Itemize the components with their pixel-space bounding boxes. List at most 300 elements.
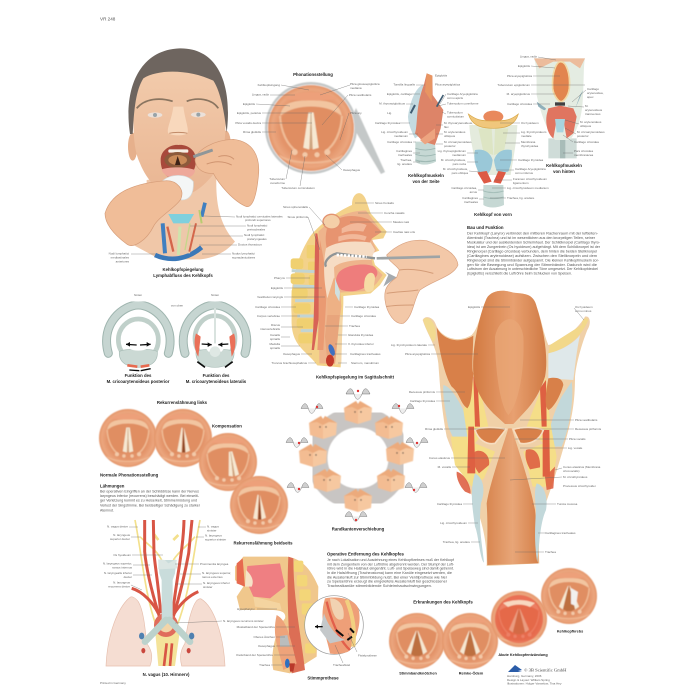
- mucosal wave tiles: [299, 401, 414, 512]
- posterior caption: [107, 373, 170, 384]
- front labels: Membrana: [521, 140, 536, 144]
- compensation circle: [199, 433, 257, 491]
- section labels: Cartilagines tracheales: [545, 531, 576, 535]
- face skin: [133, 55, 226, 197]
- front labels: Foramen cricothyroideum: [513, 177, 548, 181]
- section labels: Plica aryepiglottica: [405, 352, 430, 356]
- tongue: [336, 265, 377, 291]
- heading: [546, 163, 582, 174]
- side labels: M. thyroepiglotticus: [379, 102, 405, 106]
- front labels: Cartilago cricoidea,: [451, 186, 477, 190]
- posterior caption: M. cricoarytenoideus posterior: [107, 379, 170, 384]
- trachea: [548, 138, 577, 158]
- examiner left hand: [105, 181, 182, 246]
- back labels: obliquus: [580, 124, 592, 128]
- red cricothyroid muscles: [477, 171, 506, 184]
- panel: Kehlkopfspiegelung and lymph drainage portrait: [105, 48, 283, 278]
- neck dissection window: [155, 203, 205, 259]
- disease labels: Stimmbandknötchen: [399, 672, 437, 676]
- direction labels: von oben: [171, 304, 183, 308]
- lateralis caption: Funktion des: [203, 373, 230, 378]
- ears: [128, 131, 231, 161]
- side labels: Cartilago cricoidea: [387, 140, 412, 144]
- side labels: Cartilago thyroidea: [375, 121, 400, 125]
- text block: Operative Entfernung: röhre wird in die Halshaut eingenäht. Luft- und Speiseweg sind damit getrennt.: [327, 566, 454, 570]
- paralysis circle: [154, 409, 212, 467]
- heading: von hinten: [553, 169, 575, 174]
- posterior caption: Funktion des: [125, 373, 152, 378]
- phonation labels: Lingua, radix: [252, 92, 269, 96]
- panel: N. vagus with lungs: [100, 520, 264, 685]
- blue cricothyroid: [474, 150, 493, 173]
- heading: Kehlkopfspiegelung im Sagittalschnitt: [316, 374, 395, 380]
- vagus labels: N. laryngeus superior,: [202, 571, 231, 575]
- ventricles: [475, 427, 506, 444]
- epiglottis: [473, 291, 546, 424]
- section labels: cricovocalis): [563, 469, 580, 473]
- section labels: Lig. vocale: [568, 446, 583, 450]
- text block: Operative Entfernung: mit dem Zungenbein von der Luftröhre abgetrennt werden. Der Stumpf der Luft-: [327, 562, 454, 566]
- back labels: M. cricoarytenoideus: [577, 130, 605, 134]
- text block: Bau und Funktion: Der Kehlkopf (Larynx) verbindet den mittleren Rachenraum mit der luftleiten-: [467, 232, 598, 236]
- panel: sagittal section: [255, 193, 458, 380]
- sagittal labels: Concha nasalis: [384, 211, 405, 215]
- front labels: ligamentum: [513, 181, 529, 185]
- section labels: Cartilago thyroidea: [410, 399, 435, 403]
- sagittal labels: Vestibulum laryngis: [257, 295, 283, 299]
- publisher logo and imprint: Design & Layout: William Spring: [507, 678, 550, 682]
- text block: Bau und Funktion: Luftstrom der Ausatmung in unterschiedliche Töne umgesetzt. Der Kehlkopfdeckel: [467, 267, 598, 271]
- mirror view circle: [265, 82, 385, 174]
- text block: Lähmungen: Bei operativen Eingriffen an der Schilddrüse kann der Nervus: [100, 490, 199, 494]
- vagus labels: [103, 524, 264, 623]
- logo mark: [508, 665, 522, 672]
- vagus labels: N. laryngeus: [113, 533, 130, 537]
- hair: [128, 48, 228, 134]
- tongue: [246, 563, 285, 598]
- sagittal labels: Sinus sphenoidalis: [283, 205, 308, 209]
- vagus labels: recurrens dexter: [108, 584, 130, 588]
- normal phonation circle: [99, 409, 157, 467]
- section labels: Cartilago thyroidea: [437, 502, 462, 506]
- side labels: flex: [444, 125, 449, 129]
- right lung: [181, 599, 225, 666]
- bilateral label: Rekurrenslähmung beidseits: [234, 540, 293, 546]
- skin silhouette: [235, 557, 318, 673]
- disease labels: Kehlkopfkrebs: [557, 630, 583, 634]
- phonation labels: Rima glottidis: [243, 130, 261, 134]
- sagittal labels: Medulla: [269, 342, 280, 346]
- side labels: lig. anulare: [397, 162, 412, 166]
- larynx and trachea: [158, 560, 177, 623]
- sagittal labels: Oesophagus: [283, 352, 300, 356]
- vagus labels: sinister: [203, 585, 213, 589]
- front labels: pars obliqua: [452, 171, 468, 175]
- front labels: thyrohyoidea: [521, 144, 539, 148]
- grey ring: [317, 417, 399, 499]
- side labels: Epiglottis, cartilago: [387, 92, 412, 96]
- side labels: tracheales: [398, 153, 412, 157]
- lymph labels: mediastinales: [111, 256, 129, 260]
- Kompensation label: Kompensation: [212, 424, 242, 428]
- vagus labels: N. vagus dexter: [107, 524, 128, 528]
- sagittal labels: Epiglottis: [271, 286, 283, 290]
- front labels: Lig. cricothyroideum medianum: [507, 186, 549, 190]
- lymph labels: Nodi lymphatici: [109, 252, 129, 256]
- lymph labels: pretracheales: [247, 228, 266, 232]
- text block: Bau und Funktion: Atemtrakt (Trachea) und ist im wesentlichen aus den knorpeligen Teilen, seiner: [467, 236, 596, 240]
- panel: Kehlkopf von vorn: [438, 111, 549, 217]
- text block: Lähmungen: laryngeus inferior (recurrens) beschädigt werden. Bei einseiti-: [100, 494, 199, 498]
- phonation labels: Plica ary.: [350, 111, 362, 115]
- phonation labels: cuneiforme: [270, 181, 285, 185]
- lymph labels: anteriores: [116, 260, 129, 264]
- wave indicators: [286, 389, 428, 521]
- vagus labels: N. laryngeus recurrens sinister: [223, 619, 264, 623]
- vagus labels: superior dexter: [110, 537, 130, 541]
- text block: Operative Entfernung: [327, 552, 454, 588]
- publisher logo and imprint: © 3B Scientific GmbH: [524, 668, 567, 672]
- text block: Lähmungen: Lähmungen: [100, 484, 125, 488]
- heading: Kehlkopfmuskeln: [546, 163, 582, 168]
- sagittal labels: Glandula thyroidea: [348, 333, 374, 337]
- side labels: Plica aryepiglottica: [435, 82, 460, 86]
- front labels: [438, 121, 549, 204]
- left piriform recess: [437, 327, 473, 408]
- back labels: arytenoideus: [585, 108, 603, 112]
- phonation labels: Plica vocalis dextra: [235, 121, 261, 125]
- front labels: Cartilagines: [462, 196, 478, 200]
- prosthesis labels: Oesophagus: [258, 644, 275, 648]
- panel: Randkantenverschiebung: [286, 389, 428, 532]
- bilateral paralysis circle: [230, 476, 288, 534]
- text block: Bau und Funktion: Bau und Funktion: [467, 225, 504, 230]
- section labels: Os hyoideum: [575, 305, 593, 309]
- section labels: Lig. thyrohyoideum laterale: [391, 343, 427, 347]
- publisher logo and imprint: Illustrationen: Holger Vanselow, Tina Hey: [507, 682, 562, 686]
- sagittal labels: Cartilago cricoidea: [255, 305, 280, 309]
- vagus labels: N. laryngeus: [205, 534, 222, 538]
- right piriform recess: [546, 378, 563, 410]
- epiglottis: [553, 62, 570, 102]
- text block: Lähmungen: Atemnot.: [100, 508, 114, 512]
- text block: Lähmungen: [100, 484, 201, 512]
- lateralis function cartilage: [183, 305, 247, 367]
- prosthesis labels: Oberes Ästchen: [253, 635, 275, 639]
- side labels: Tonsilla lingualis: [393, 82, 415, 86]
- vagus labels: N. laryngealis inferior: [104, 571, 132, 575]
- lateralis caption: M. cricoarytenoideus lateralis: [186, 379, 247, 384]
- red muscle bundles: [457, 377, 555, 494]
- sagittal labels: Truncus brachiocephalicus: [271, 361, 307, 365]
- lower tongue spatula: [383, 272, 397, 287]
- trachea lumen: [487, 428, 538, 565]
- side labels: Tuberculum cuneiforme: [447, 102, 479, 106]
- sagittal labels: Sinus piriformis: [287, 215, 308, 219]
- phonation labels: Epiglottis: [243, 102, 255, 106]
- thyrohyoid membrane: [548, 335, 580, 380]
- section labels: Conus elasticus: [429, 456, 450, 460]
- publisher logo and imprint: Hamburg, Germany, 2006: [507, 674, 542, 678]
- vagus labels: dexter: [124, 575, 132, 579]
- sagittal labels: [255, 201, 416, 365]
- text block: Bau und Funktion: Muskulatur und der auskleidenden Schleimhaut. Der Schildknorpel (Cartilago thyro-: [467, 240, 600, 244]
- front labels: medianum: [452, 153, 466, 157]
- front labels: Lig. thyrohyoideum: [521, 130, 547, 134]
- laryngeal cancer circle: [541, 568, 597, 624]
- sagittal labels: Canalis: [270, 333, 280, 337]
- phonation labels: [235, 82, 380, 190]
- disease labels: Akute Kehlkopfentzündung: [498, 653, 548, 657]
- side labels: Trachea,: [400, 158, 412, 162]
- muscles: [415, 73, 443, 145]
- mediastinal fat: [155, 630, 180, 666]
- back labels: arytenoidea,: [587, 91, 604, 95]
- sagittal labels: Discus: [271, 323, 280, 327]
- panel: muscle function diagrams: [107, 293, 247, 384]
- right yellow fat and muscle: [523, 377, 557, 487]
- panel: Kehlkopfmuskeln von der Seite: [375, 73, 479, 184]
- brows, eyes and nose: [137, 99, 218, 135]
- text block: Operative Entfernung: zu Speiseröhre erzeugt die eingeleitete Ausatemluft bei geschlossener: [327, 580, 448, 584]
- section labels: Conus elasticus (Membrana: [563, 465, 601, 469]
- Stimmbandknötchen circle: [389, 613, 445, 669]
- nasal cavity: [326, 216, 382, 253]
- back labels: Cartilago: [587, 87, 599, 91]
- panel: Erkrankungen des Kehlkopfs: [389, 568, 597, 676]
- section labels: Tunica mucosa: [557, 502, 578, 506]
- heading: [408, 173, 444, 184]
- vertebrae: [291, 245, 317, 343]
- prosthesis labels: Hypopharynx: [237, 607, 255, 611]
- side labels: cornu apicis: [447, 96, 464, 100]
- section labels: Plica vocalis: [569, 437, 586, 441]
- hilar vessels: [139, 633, 194, 653]
- text block: Operative Entfernung: In die Halsöffnung (Tracheostoma) kann eine Kanüle eingesetzt werden, die: [327, 571, 452, 575]
- front labels: Lig. thyroepiglotticum: [438, 149, 466, 153]
- lower cartilages: [472, 473, 484, 563]
- back labels: M. aryepiglotticus: [507, 92, 530, 96]
- sagittal labels: spinalis: [270, 337, 280, 341]
- section labels: Rima glottidis: [425, 427, 443, 431]
- panel: Rekurrenslähmung links circles: [99, 400, 293, 546]
- direction labels: hinten: [134, 293, 142, 297]
- nerves yellow: [135, 520, 200, 657]
- front labels: M. cricothyroideus,: [441, 158, 466, 162]
- examiner right hand: [195, 139, 259, 207]
- back labels: posterior: [577, 134, 589, 138]
- heading: Phonationsstellung: [293, 72, 333, 77]
- back labels: M. arytenoideus: [580, 120, 602, 124]
- left yellow fat and muscle: [451, 373, 495, 487]
- front labels: Cartilago Aryepiglottica: [515, 167, 546, 171]
- side labels: Epiglottis: [435, 74, 448, 78]
- text block: Bau und Funktion: (Cartilagines arytenoideae) aufsitzen. Zwischen den Stellknorpeln und dem: [467, 254, 597, 258]
- thyroid cartilage: [534, 58, 585, 140]
- trachea parts: [280, 635, 290, 647]
- phonation labels: Oesophagus: [343, 168, 361, 172]
- prosthesis labels: Kieferband der Speiseröhre: [236, 653, 273, 657]
- aortic arch: [154, 613, 178, 637]
- prosthesis labels: Muskelband der Speiseröhre: [237, 625, 275, 629]
- section labels: Lig. cricothyroideum: [440, 521, 467, 525]
- section labels: Recessus piriformis: [409, 390, 435, 394]
- section labels: Epiglottis: [468, 305, 481, 309]
- side labels: posterior: [444, 144, 456, 148]
- sagittal labels: Cartilagines tracheales: [350, 352, 381, 356]
- side labels: Lig.: [387, 111, 392, 115]
- lymph labels: profundi superiores: [245, 218, 271, 222]
- prosthesis labels: Tracheafistel: [333, 663, 350, 667]
- back labels: Epiglottis: [518, 64, 530, 68]
- text block: Lähmungen: ger Verletzung kommt es zu Heiserkeit, Stimmermüdung und: [100, 498, 197, 502]
- sagittal labels: Cartilago thyroidea: [354, 305, 380, 309]
- back labels: M.: [585, 104, 588, 108]
- back labels: Tuberculum epiglotticum: [497, 83, 530, 87]
- side labels: corniculatum: [447, 114, 465, 118]
- side labels: Cartilagines: [396, 149, 412, 153]
- lymph labels: supraclaviculares: [232, 256, 256, 260]
- front labels: mediale: [521, 134, 532, 138]
- text block: Operative Entfernung: die Ausatemluft zur Stimmbildung nutzt. Bei einer Ventilprothese wie hier: [327, 576, 448, 580]
- back labels: Plica aryepiglottica: [507, 74, 532, 78]
- sagittal labels: Cartilago cricoidea: [351, 314, 376, 318]
- vertebrae: [294, 561, 316, 653]
- heading: Kehlkopfspiegelung: [162, 267, 204, 272]
- side labels: Tuberculum: [447, 110, 463, 114]
- heading: [153, 267, 213, 278]
- back labels: [497, 54, 605, 157]
- section labels: Processus cricothyroidei: [563, 484, 596, 488]
- sagittal labels: Trachea: [349, 324, 360, 328]
- text block: Bau und Funktion: Ringknorpel (Cartilago cricoidea) verbunden, dem hinten die beiden Stellknorpel: [467, 250, 597, 254]
- front labels: Cartilago thyroidea: [518, 158, 544, 162]
- phonation labels: Plica glossoepiglottica: [350, 82, 380, 86]
- panel: Stimmprothese section: [235, 557, 377, 680]
- trachea: [325, 315, 340, 363]
- text block: Operative Entfernung: Je nach Lokalisation und Ausdehnung eines Kehlkopfkrebses muß der Kehlkopf: [327, 558, 454, 562]
- lymph labels: [109, 214, 283, 264]
- vagus labels: superior sinister: [205, 538, 226, 542]
- heading: N. vagus (10. Hirnnerv): [143, 672, 190, 677]
- back labels: Cartilago cricoidea: [574, 140, 599, 144]
- front labels: Os hyoideum: [521, 121, 539, 125]
- Reinke-Ödem circle: [442, 613, 498, 669]
- open mouth with mirror view: [161, 145, 196, 180]
- phonation labels: Epiglottis, petiolus: [237, 111, 261, 115]
- trachea: [415, 142, 436, 165]
- direction labels: hinten: [211, 293, 219, 297]
- great vessels: [327, 343, 336, 357]
- caption: Randkantenverschiebung: [332, 526, 385, 532]
- section labels: Trachea: [545, 550, 556, 554]
- phonation labels: Tuberculum: [269, 177, 285, 181]
- front labels: M. cricothyroideus,: [443, 167, 468, 171]
- heading: Lymphabfluss des Kehlkopfs: [153, 273, 213, 278]
- nose and upper lip: [237, 558, 245, 587]
- back labels: apex: [587, 95, 594, 99]
- text block: Bau und Funktion: idea) ist am Zungenbein (Os hyoideum) aufgehängt. Mit dem Schildknorpel ist der: [467, 245, 601, 249]
- posterior function cartilage: [107, 305, 170, 371]
- panel: large larynx section: [391, 291, 602, 566]
- zoomed circle with prosthesis: [305, 596, 363, 654]
- lymph labels: Nodi lymphatici: [244, 233, 265, 237]
- front labels: pars recta: [453, 162, 466, 166]
- sagittal labels: spinalis: [270, 346, 280, 350]
- vagus labels: Prominentia laryngea: [200, 562, 229, 566]
- sagittal labels: intervertebralis: [260, 327, 280, 331]
- sagittal labels: V. thyroidea inferior: [348, 342, 374, 346]
- vagus labels: ramus externus: [202, 575, 223, 579]
- acute laryngitis circle: [491, 591, 547, 647]
- side labels: Lig. cricothyroideum: [381, 130, 408, 134]
- section labels: M. vocalis: [438, 465, 451, 469]
- vagus labels: sinister: [207, 528, 217, 532]
- lymph labels: Nodi lymphatici: [247, 224, 268, 228]
- arteries: [145, 520, 192, 630]
- inner tissue: [318, 211, 383, 364]
- text block: Bau und Funktion: gen für die Bewegung und Spannung der Stimmbänder. Dadurch wird die: [467, 263, 597, 267]
- section labels: M. cricothyroideus: [563, 475, 588, 479]
- vagus labels: ramus internus: [112, 566, 132, 570]
- heading: Kehlkopf von vorn: [474, 212, 512, 217]
- catalogue number: VR 248: [100, 16, 116, 22]
- side labels: [375, 74, 479, 166]
- panel: Kehlkopfmuskeln von hinten: [497, 54, 605, 174]
- back labels: transversus: [585, 112, 601, 116]
- phonation labels: Tuberculum corniculatum: [281, 186, 315, 190]
- larynx: [327, 277, 341, 317]
- sagittal labels: Pharynx: [274, 276, 285, 280]
- lymph labels: Ductus thoracicus: [238, 242, 262, 246]
- prosthesis labels: Fistelprothese: [358, 654, 377, 658]
- heading: von der Seite: [413, 179, 440, 184]
- normal phonation label: Normale Phonationsstellung: [100, 472, 159, 478]
- hyoid horns: [423, 318, 436, 342]
- lateralis caption: [186, 373, 247, 384]
- right cartilage: [548, 382, 572, 447]
- phonation labels: Plica vestibularis: [349, 93, 372, 97]
- prosthesis labels: [236, 607, 377, 667]
- back labels: Pars cricoidea: [574, 149, 593, 153]
- head and neck silhouette: [291, 193, 387, 367]
- back labels: membranacea: [574, 153, 594, 157]
- lymph labels: prelaryngeales: [247, 237, 267, 241]
- side labels: M. cricoarytenoideus: [444, 140, 472, 144]
- gauze: [162, 175, 193, 200]
- section labels: cornu minus: [575, 309, 592, 313]
- vagus labels: N. laryngeus inferior: [203, 581, 230, 585]
- text block: Bau und Funktion: [467, 225, 601, 276]
- side labels: Cartilago Aryepiglottica: [447, 92, 478, 96]
- pharynx and neck tissue: [288, 557, 305, 673]
- front labels: cornu inferius: [515, 171, 534, 175]
- oral and pharyngeal space: [324, 242, 375, 298]
- side labels: M. thyroarytenoideus,: [444, 121, 473, 125]
- outer silhouette: [423, 291, 590, 566]
- cartilage: [408, 84, 425, 138]
- sagittal labels: Meatus nasi: [393, 220, 410, 224]
- prosthesis labels: Trachea: [259, 663, 270, 667]
- section labels: Plica vestibularis: [575, 418, 598, 422]
- front labels: Trachea, lig. anulare: [507, 196, 535, 200]
- vagus labels: N. vagus: [207, 524, 219, 528]
- text block: Bau und Funktion: Ringknorpel sind die Stimmbänder aufgespannt. Die kleinen Kehlkopfmuskeln sor-: [467, 258, 599, 262]
- sagittal labels: Sternum, manubrium: [351, 361, 380, 365]
- mirror handle: [193, 150, 213, 157]
- sagittal labels: Corpus vertebrae: [257, 314, 280, 318]
- front labels: tracheales: [464, 200, 478, 204]
